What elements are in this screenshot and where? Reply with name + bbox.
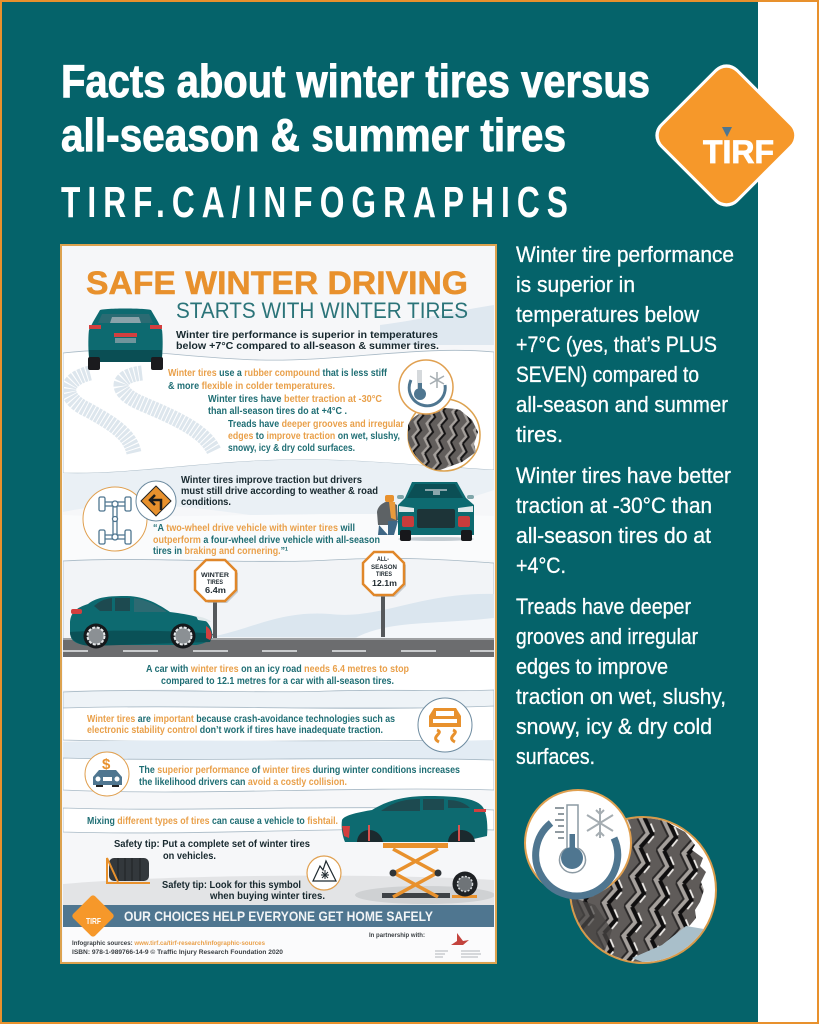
drivers text: conditions.	[181, 496, 231, 508]
crash-avoidance text: Winter tires are important because crash-avoidance technologies such as	[87, 713, 395, 725]
footer sources: ISBN: 978-1-989766-14-9 © Traffic Injury Research Foundation 2020	[72, 948, 283, 956]
icon: drivetrain	[83, 487, 147, 551]
right column text: +4°C.	[516, 553, 566, 578]
right column text: SEVEN) compared to	[516, 362, 699, 387]
sign: all-season tires 12.1m	[363, 552, 406, 637]
logo: TIRF diamond	[649, 58, 804, 213]
right column text: Treads have deeper	[516, 594, 691, 619]
sign: all-season tires 12.1m: TIRES	[376, 571, 393, 578]
safety tip: complete set	[114, 840, 310, 859]
safety tip: symbol: when buying winter tires.	[209, 890, 325, 902]
drivers text	[181, 476, 378, 505]
sign: all-season tires 12.1m: SEASON	[371, 564, 397, 571]
drivers text: Winter tires improve traction but drivers	[181, 474, 362, 486]
collision text	[139, 766, 460, 787]
crash-avoidance text: electronic stability control don’t work if tires have inadequate traction.	[87, 724, 383, 736]
right column text: traction at -30°C than	[516, 493, 712, 518]
treads text: snowy, icy & dry cold surfaces.	[228, 442, 355, 454]
car rear view	[88, 308, 163, 370]
right column text: surfaces.	[516, 744, 595, 769]
right column text: edges to improve	[516, 654, 668, 679]
right column text: traction on wet, slushy,	[516, 684, 726, 709]
partner credit	[369, 932, 481, 957]
subheading: STARTS WITH WINTER TIRES	[176, 298, 468, 323]
title: Facts about winter tires versus	[61, 55, 650, 107]
banner	[63, 905, 494, 927]
spare wheel	[452, 872, 478, 898]
right column text: +7°C (yes, that’s PLUS	[516, 332, 717, 357]
quote text	[153, 522, 380, 557]
car side view	[70, 596, 213, 648]
small tire photo	[408, 399, 480, 471]
treads text	[228, 418, 404, 454]
title	[61, 55, 650, 161]
right column text: temperatures below	[516, 302, 699, 327]
safety tip: complete set: Safety tip: Put a complete set of winter tires	[114, 838, 310, 850]
sign: all-season tires 12.1m: 12.1m	[372, 579, 397, 588]
traction text: Winter tires have better traction at -30°C	[208, 393, 382, 405]
safety tip: symbol	[162, 880, 324, 901]
rubber compound text: Winter tires use a rubber compound that is less stiff	[168, 367, 387, 379]
footer sources: Infographic sources: www.tirf.ca/tirf-research/infographic-sources	[72, 940, 265, 947]
treads text: Treads have deeper grooves and irregular	[228, 418, 404, 430]
title: all-season & summer tires	[61, 109, 566, 161]
right column text: tires.	[516, 422, 563, 447]
small thermometer icon	[399, 360, 453, 414]
right column text	[516, 242, 734, 769]
icon: curve road sign	[136, 481, 176, 521]
stopping distance text: compared to 12.1 metres for a car with all-season tires.	[161, 675, 394, 687]
right column text: Winter tires have better	[516, 463, 731, 488]
banner logo: TIRF	[86, 916, 101, 926]
banner: OUR CHOICES HELP EVERYONE GET HOME SAFELY	[124, 908, 434, 924]
sign: winter tires 6.4m: WINTER	[201, 572, 229, 579]
person at tire	[377, 495, 398, 535]
right column text: all-season tires do at	[516, 523, 711, 548]
sign: winter tires 6.4m	[195, 560, 238, 638]
sign: all-season tires 12.1m: ALL-	[377, 556, 389, 563]
treads text: edges to improve traction on wet, slushy,	[228, 430, 400, 442]
collision text: The superior performance of winter tires during winter conditions increases	[139, 764, 460, 776]
safety tip: complete set: on vehicles.	[163, 850, 216, 862]
intro statement: Winter tire performance is superior in temperatures	[176, 329, 438, 341]
logo: TIRF diamond: TIRF	[703, 134, 774, 170]
right column text: Winter tire performance	[516, 242, 734, 267]
heading: SAFE WINTER DRIVING	[86, 265, 468, 301]
footer sources	[72, 940, 283, 956]
snow bands	[63, 305, 495, 961]
stopping distance text: A car with winter tires on an icy road needs 6.4 metres to stop	[146, 663, 409, 675]
traction text	[208, 394, 382, 414]
quote text: tires in braking and cornering.”¹	[153, 545, 288, 557]
infographic poster	[61, 245, 496, 963]
road	[63, 638, 494, 657]
collision text: the likelihood drivers can avoid a costly collision.	[139, 776, 347, 788]
icon: tire stack	[106, 858, 150, 884]
icon: car with dollar	[85, 752, 129, 796]
thermometer icon circle	[525, 790, 631, 896]
right column text: grooves and irregular	[516, 624, 698, 649]
tire tread photo	[560, 810, 716, 965]
intro statement	[176, 330, 438, 351]
quote text: outperform a four-wheel drive vehicle with all-season	[153, 534, 380, 546]
safety tip: symbol: Safety tip: Look for this symbol	[162, 879, 301, 891]
traction text: than all-season tires do at +4°C .	[208, 405, 347, 417]
rubber compound text: & more flexible in colder temperatures.	[168, 380, 335, 392]
sign: winter tires 6.4m: TIRES	[207, 579, 224, 586]
scissor lift	[382, 843, 450, 898]
drivers text: must still drive according to weather & road	[181, 485, 378, 497]
tire tracks	[69, 373, 214, 453]
quote text: “A two-wheel drive vehicle with winter tires will	[153, 522, 355, 534]
crash-avoidance text	[87, 714, 395, 735]
subtitle url: TIRF.CA/INFOGRAPHICS	[61, 178, 568, 227]
icon: car with dollar: $	[102, 756, 111, 773]
car front view	[397, 482, 474, 541]
rubber compound text	[168, 368, 387, 391]
intro statement: below +7°C compared to all-season & summer tires.	[176, 340, 439, 352]
right column text: is superior in	[516, 272, 635, 297]
stopping distance text	[146, 664, 409, 686]
partner credit: In partnership with:	[369, 932, 425, 939]
right column text: snowy, icy & dry cold	[516, 714, 712, 739]
sign: winter tires 6.4m: 6.4m	[205, 586, 226, 595]
fishtail text: Mixing different types of tires can cause a vehicle to fishtail.	[87, 815, 338, 827]
right column text: all-season and summer	[516, 392, 728, 417]
car on lift	[342, 796, 487, 842]
banner logo	[71, 894, 115, 938]
icon: mountain snowflake	[307, 856, 341, 890]
icon: skidding car	[418, 698, 472, 752]
